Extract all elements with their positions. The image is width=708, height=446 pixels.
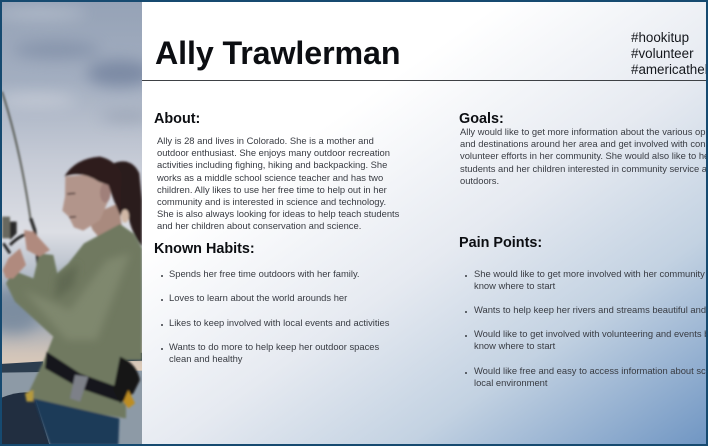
shirt	[6, 224, 142, 418]
water	[0, 371, 143, 446]
about text: activities including fighing, hiking and backpacking. She	[157, 159, 387, 170]
hashtags	[631, 30, 706, 77]
about text: outdoor enthusiast. She enjoys many outdoor recreation	[157, 147, 390, 158]
jeans	[33, 398, 119, 445]
reel	[2, 217, 10, 238]
hair	[64, 157, 122, 217]
title: Ally Trawlerman	[155, 35, 400, 71]
rod	[2, 92, 31, 220]
pain points list: know where to start	[474, 340, 555, 351]
about text: community and is interested in science and technology.	[157, 196, 386, 207]
heading: pain points: Pain Points:	[459, 235, 542, 251]
known habits list	[161, 268, 390, 364]
content panel	[142, 2, 706, 444]
about text: works as a middle school science teacher and has two	[157, 172, 383, 183]
known habits list: Wants to do more to help keep her outdoor spaces	[169, 341, 379, 352]
belt	[45, 352, 127, 402]
about text: children. Ally likes to use her free time to help out in her	[157, 184, 387, 195]
heading: goals: Goals:	[459, 111, 504, 127]
goals text: outdoors.	[460, 175, 499, 186]
heading: about: About:	[154, 111, 200, 127]
ponytail	[113, 161, 142, 247]
about text: and her children about conservation and science.	[157, 220, 361, 231]
eye and lips	[67, 193, 76, 217]
hands	[24, 230, 50, 257]
heading: known habits: Known Habits:	[154, 241, 255, 257]
face	[62, 173, 110, 231]
known habits list: Spends her free time outdoors with her family.	[169, 268, 360, 278]
neck	[87, 203, 122, 237]
pain points list: local environment	[474, 377, 547, 388]
hashtags: #volunteer	[631, 46, 694, 61]
boat	[0, 392, 50, 446]
known habits list: Likes to keep involved with local events and activities	[169, 316, 389, 328]
known habits list: clean and healthy	[169, 353, 242, 364]
pain points list	[465, 268, 706, 388]
photo: woman fishing	[2, 2, 142, 444]
goals text	[460, 126, 706, 186]
hashtags: #hookitup	[631, 30, 689, 45]
pain points list: know where to start	[474, 280, 555, 291]
about text: She is also always looking for ideas to help teach students	[157, 208, 399, 219]
known habits list: Loves to learn about the world arounds her	[169, 292, 347, 303]
header rule	[142, 80, 706, 81]
about text: Ally is 28 and lives in Colorado. She is a mother and	[157, 135, 374, 146]
about text	[157, 135, 399, 231]
